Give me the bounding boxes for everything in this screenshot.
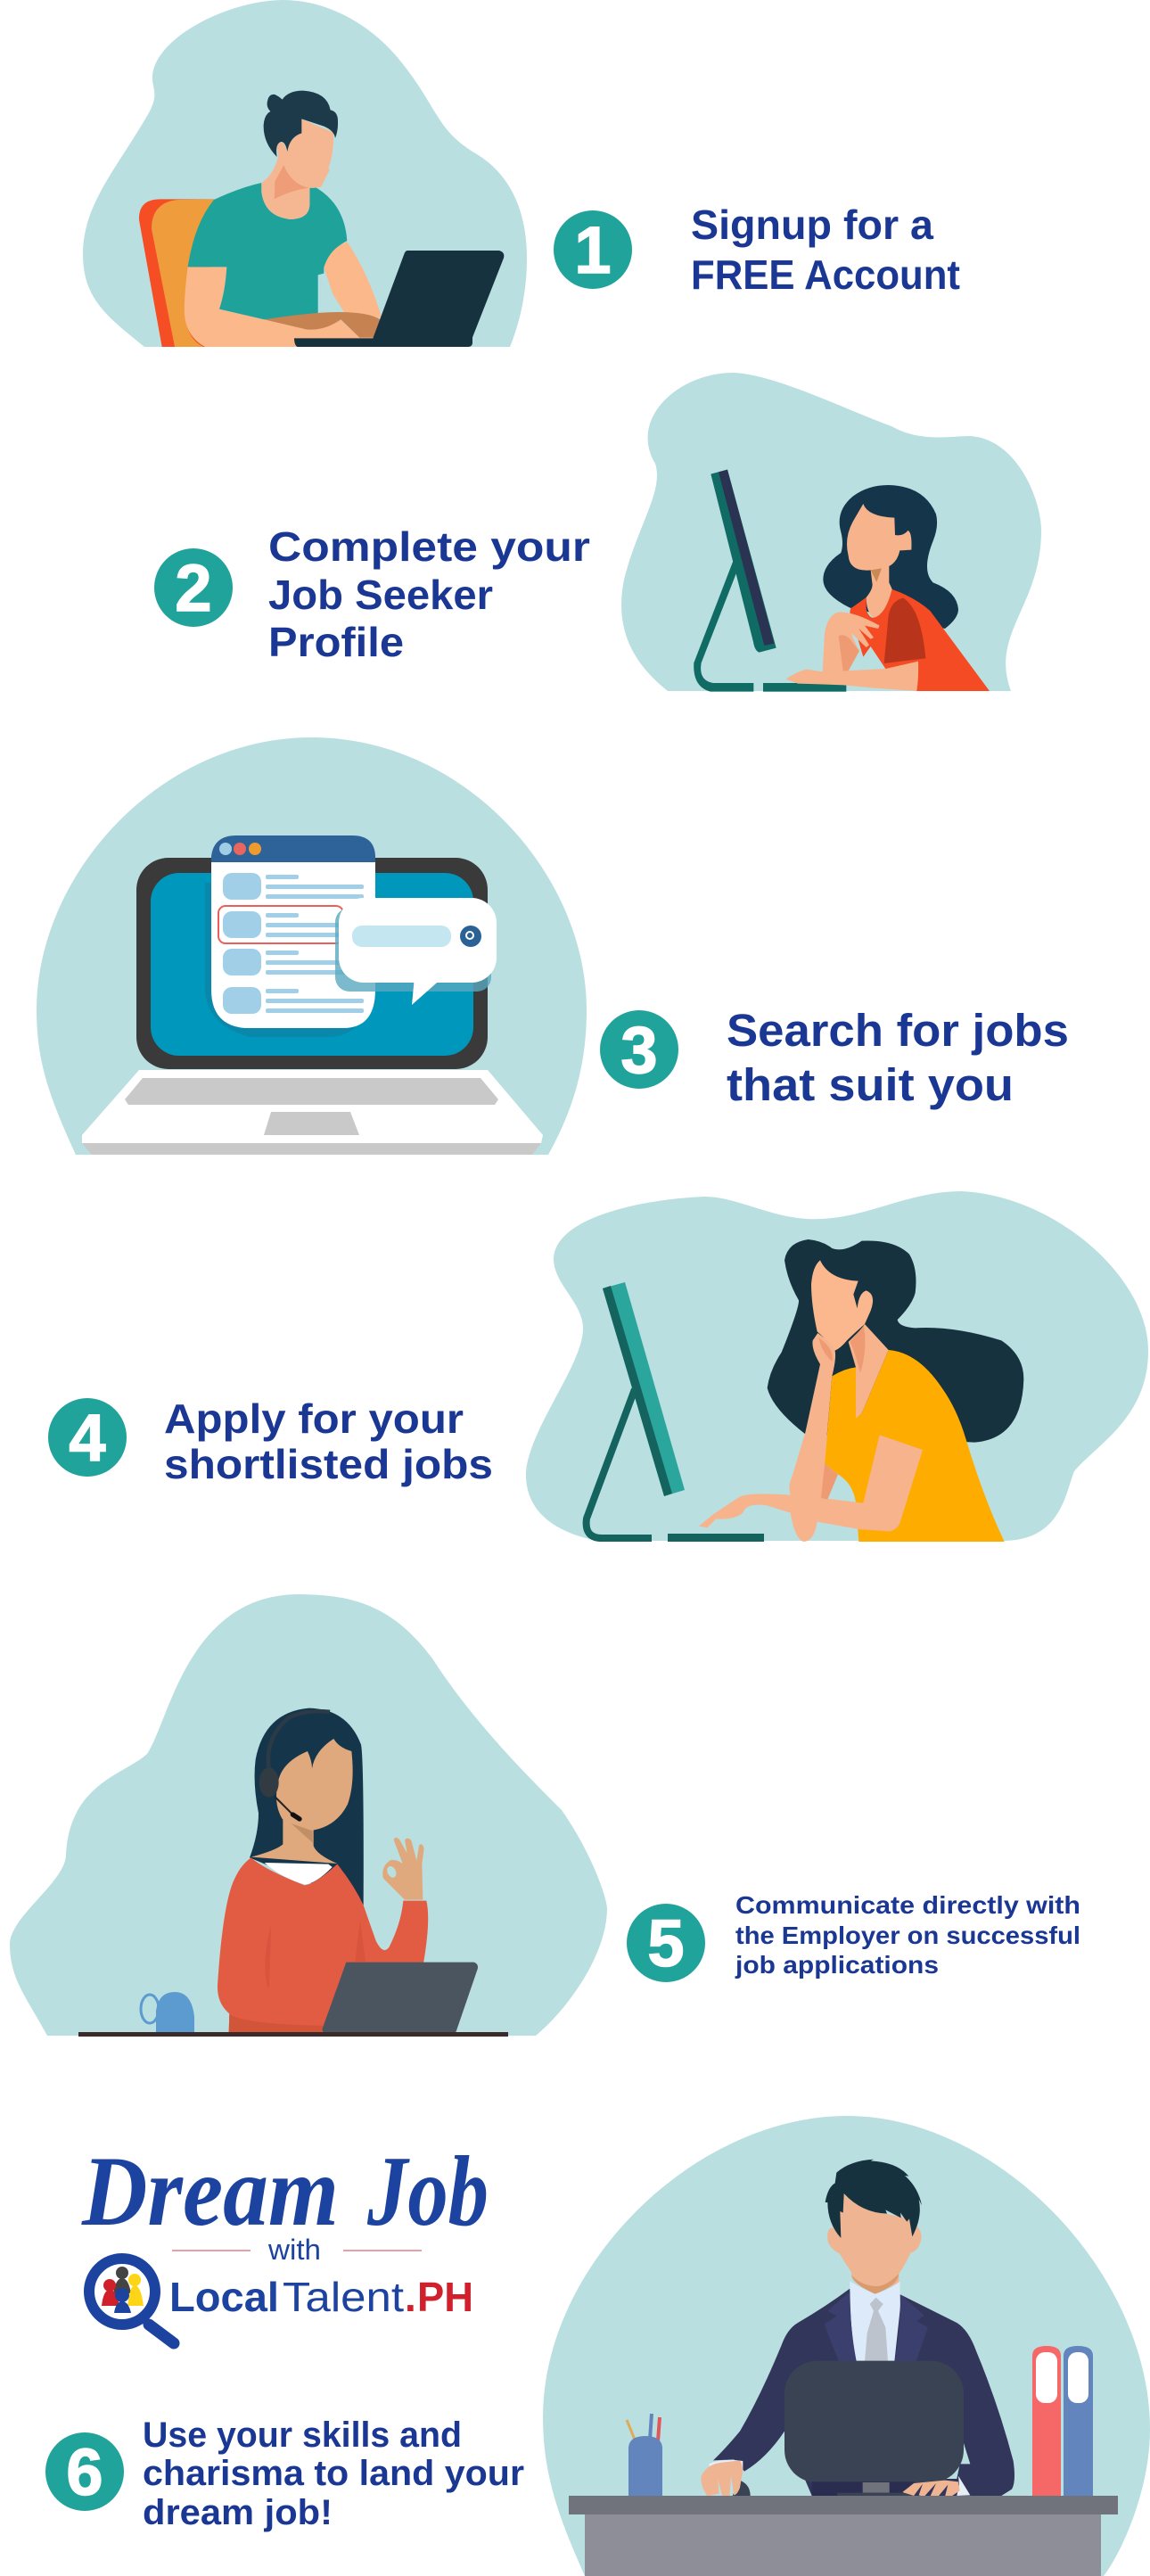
face: [277, 119, 333, 188]
step 3 text: Search for jobs: [727, 1005, 1069, 1056]
step 3 number badge: [600, 1010, 678, 1089]
step 4 text: shortlisted jobs: [164, 1441, 493, 1487]
step 5 text: the Employer on successful: [735, 1922, 1080, 1949]
arm and hand: [786, 613, 918, 691]
step 5 illustration: support agent: [10, 1594, 607, 2037]
laptop back: [784, 2361, 964, 2482]
step 5 text: [735, 1891, 1080, 1979]
step 5 text: job applications: [735, 1951, 939, 1979]
LocalTalent.PH wordmark: Talent: [283, 2274, 404, 2320]
right hand: [902, 2481, 960, 2498]
step 2 text: [268, 523, 590, 665]
search bubble: [335, 898, 497, 1005]
LocalTalent.PH wordmark: [169, 2274, 473, 2320]
white collar: [265, 1863, 333, 1884]
laptop screen: [136, 858, 488, 1069]
step 3 text: that suit you: [727, 1059, 1014, 1110]
laptop: [323, 1963, 478, 2035]
left cuff: [709, 2460, 743, 2470]
step 3 text: [727, 1005, 1069, 1110]
LocalTalent.PH wordmark: Local: [169, 2274, 279, 2320]
jacket: [713, 2289, 1014, 2496]
step 6 text: dream job!: [143, 2493, 333, 2532]
man figure: [139, 91, 504, 347]
step 4 text: [164, 1395, 493, 1487]
shirt: [850, 589, 990, 691]
neck and chest: [251, 1813, 337, 1864]
blob background 2: [621, 373, 1041, 691]
headset: [259, 1711, 330, 1819]
neck shadow: [851, 2274, 899, 2294]
neck shadow: [292, 1823, 313, 1843]
step 1 text: FREE Account: [691, 251, 960, 298]
step 4 number badge: [48, 1398, 127, 1477]
step 2 number badge: 2: [175, 551, 212, 625]
neck shadow: [871, 568, 882, 582]
ok hand: [382, 1838, 424, 1900]
LocalTalent.PH wordmark: PH: [417, 2274, 473, 2320]
neck: [849, 1324, 889, 1419]
right arm: [324, 242, 382, 318]
step 6 number badge: 6: [66, 2435, 103, 2509]
forearm shadow: [265, 312, 381, 338]
hair: [826, 2160, 922, 2238]
step 6 number badge: [45, 2432, 124, 2511]
pencil holder: [627, 2414, 662, 2496]
step 4 illustration: woman thinking at desktop: [526, 1191, 1148, 1542]
blob background 4: [526, 1191, 1148, 1541]
sweater hem shade: [229, 2013, 324, 2032]
body arm: [185, 267, 374, 347]
neck shadow: [850, 1326, 865, 1373]
agent figure: [218, 1708, 478, 2035]
laptop base: [82, 1070, 543, 1155]
monitor: [587, 1282, 764, 1542]
chair: [139, 199, 216, 347]
step 2 number badge: [154, 548, 233, 627]
sleeve gap: [945, 2443, 970, 2479]
face: [811, 1260, 873, 1351]
blob background 1: [83, 0, 527, 347]
LocalTalent.PH wordmark: .: [405, 2274, 416, 2320]
blob background 3: [37, 737, 587, 1155]
shirt: [850, 2281, 900, 2361]
neck shadow: [275, 165, 309, 199]
step 6 text: [143, 2416, 524, 2532]
arms: [699, 1333, 923, 1542]
step 2 text: Job Seeker: [268, 572, 493, 618]
inner arm shadow: [839, 635, 859, 671]
sweater folds: [265, 1920, 366, 1990]
lapels: [825, 2292, 928, 2361]
dark sleeve: [884, 598, 925, 663]
step 5 number badge: 5: [647, 1906, 685, 1980]
desk line: [78, 2032, 508, 2037]
laptop: [294, 251, 504, 347]
step 5 text: Communicate directly with: [735, 1891, 1080, 1919]
step 2 text: Profile: [268, 619, 404, 665]
logo: Dream Job with LocalTalent.PH: [81, 2136, 489, 2343]
Dream Job script heading: [81, 2136, 489, 2247]
job listing document: [205, 835, 375, 1037]
mug: [141, 1992, 194, 2034]
step 5 number badge: [627, 1904, 705, 1982]
step 1 number badge: 1: [574, 213, 612, 287]
binders: [1032, 2346, 1093, 2498]
shirt: [825, 1350, 1005, 1542]
hair: [823, 485, 958, 629]
step 1 number badge: [554, 210, 632, 289]
step 2 text: Complete your: [268, 523, 590, 570]
desk: [569, 2496, 1118, 2576]
Dream Job script heading: Dream: [81, 2136, 339, 2247]
step 1 text: [691, 202, 960, 298]
belt: [812, 2481, 915, 2496]
face: [827, 2193, 921, 2294]
step 4 number badge: 4: [69, 1401, 106, 1475]
man figure: [701, 2160, 1014, 2498]
step 3 number badge: 3: [620, 1013, 658, 1087]
left hand: [701, 2460, 743, 2498]
with divider: with: [267, 2234, 321, 2266]
step 4 text: Apply for your: [164, 1395, 464, 1442]
mouse: [733, 2481, 751, 2496]
face and neck: [847, 504, 911, 618]
tie: [865, 2298, 888, 2361]
palm shadow: [818, 1337, 833, 1362]
step 3 illustration: laptop job search: [37, 737, 587, 1155]
magnifier mark with people: [89, 2259, 174, 2343]
blob background 5: [10, 1594, 607, 2036]
step 6 illustration: man in suit at desk: [543, 2116, 1150, 2576]
monitor: [694, 470, 846, 692]
hair: [250, 1708, 364, 1905]
woman figure: [699, 1239, 1023, 1542]
right cuff: [957, 2476, 970, 2496]
face: [276, 1739, 353, 1831]
step 1 illustration: man at laptop: [83, 0, 527, 347]
step 2 illustration: woman at desktop: [621, 373, 1041, 692]
step 1 text: Signup for a: [691, 202, 933, 248]
step 6 text: charisma to land your: [143, 2454, 524, 2493]
blob background 6: [543, 2116, 1150, 2576]
hair: [264, 91, 338, 157]
hair: [768, 1239, 1023, 1443]
sweater: [218, 1857, 428, 2032]
woman figure: [694, 470, 990, 692]
t-shirt: [188, 183, 347, 319]
step 6 text: Use your skills and: [143, 2416, 462, 2455]
Dream Job script heading: Job: [366, 2136, 489, 2247]
arm shadow: [821, 1464, 838, 1500]
neck: [261, 156, 330, 219]
